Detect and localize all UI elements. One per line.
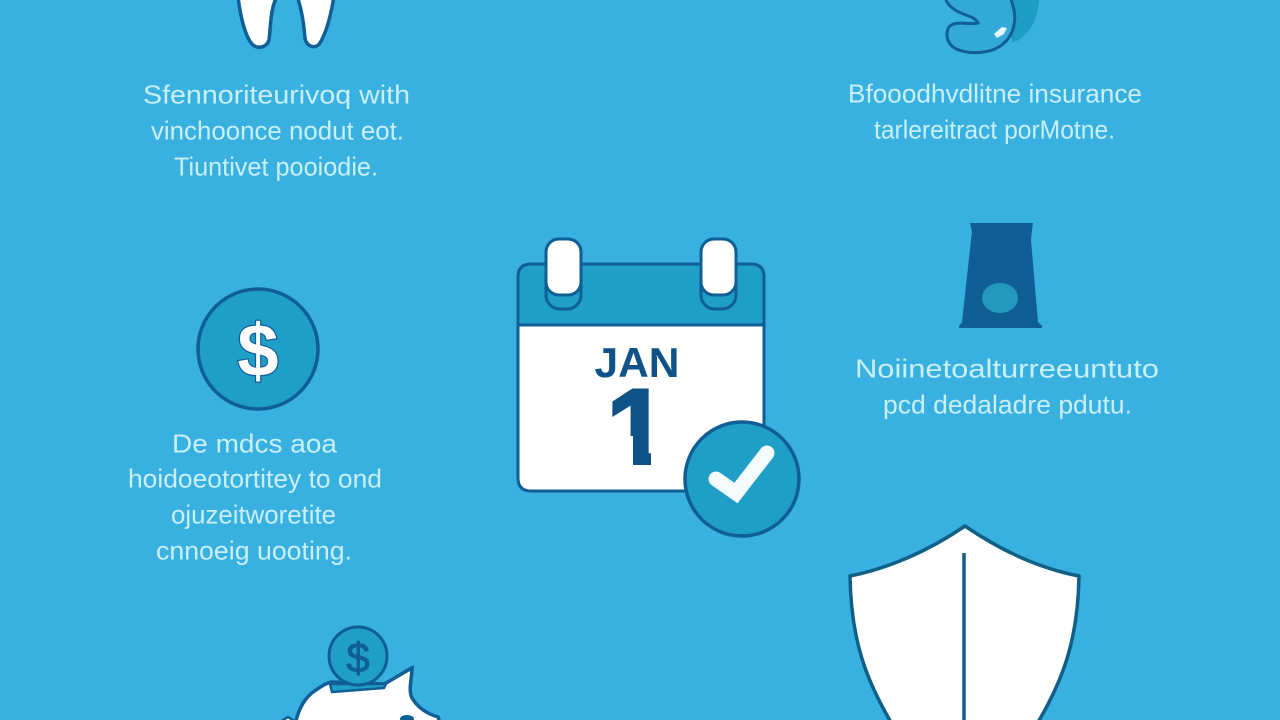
text block: container description: pcd dedaladre pdutu. [883, 390, 1132, 420]
calendar header [518, 264, 764, 325]
dollar sign: $ [237, 309, 279, 392]
icon: piggy bank [280, 627, 441, 720]
icon: dollar coin [198, 289, 318, 409]
left binder ring [546, 239, 581, 309]
text block: tooth description: Tiuntivet pooiodie. [174, 152, 378, 182]
pig eye [400, 715, 414, 720]
pig tail [280, 717, 296, 720]
text block: dollar description: De mdcs aoa [172, 428, 338, 458]
text block: container description [855, 354, 1159, 420]
text block: dollar description: ojuzeitworetite [171, 500, 336, 530]
shield center line [962, 553, 966, 720]
right binder ring [701, 239, 736, 309]
text block: tooth description: vinchoonce nodut eot. [151, 116, 404, 146]
text block: dollar description: cnnoeig uooting. [156, 536, 352, 566]
check badge [685, 422, 799, 536]
coin [329, 627, 387, 685]
text block: insurance description [848, 78, 1142, 144]
text block: insurance description: Bfooodhvdlitne insurance [848, 78, 1142, 108]
icon: shield [850, 526, 1079, 720]
text block: dollar description: hoidoeotortitey to ond [128, 464, 382, 494]
text block: container description: Noiinetoalturreeuntuto [855, 354, 1159, 384]
text block: insurance description: tarlereitract porMotne. [874, 114, 1115, 144]
coin dollar sign: $ [346, 634, 370, 681]
coin slot [330, 684, 386, 692]
icon: calendar [518, 239, 799, 536]
text block: tooth description: Sfennoriteurivoq with [143, 80, 410, 110]
icon: dark container [959, 223, 1042, 328]
text block: dollar description [128, 428, 382, 566]
day number: 1 [606, 367, 668, 490]
pig body [295, 668, 441, 720]
month label: JAN [594, 339, 680, 386]
icon: water drop [945, 0, 1039, 53]
text block: tooth description [143, 80, 410, 182]
icon: tooth [238, 0, 334, 47]
calendar page [518, 325, 764, 491]
